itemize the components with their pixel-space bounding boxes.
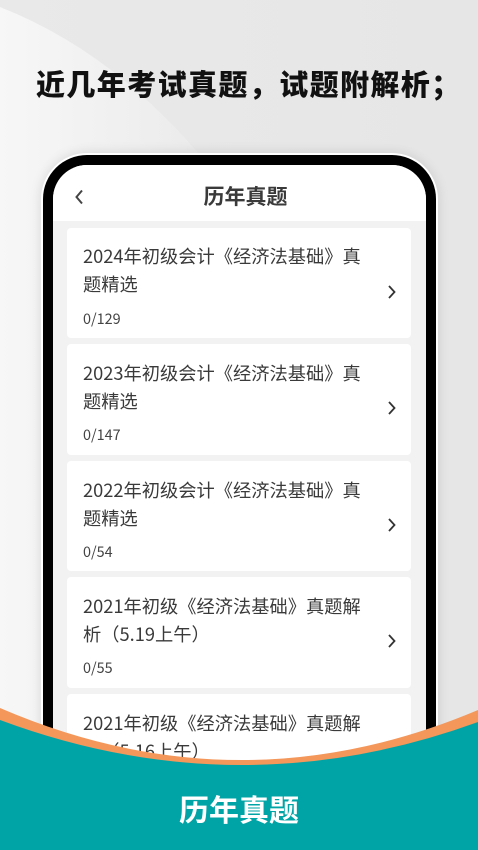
title: 近几年考试真题，试题附解析； <box>36 62 462 104</box>
back arrow <box>75 190 83 204</box>
card 2021 5.16 <box>67 694 411 805</box>
card 2023: 2023年初级会计《经济法基础》真 <box>83 360 361 386</box>
card 2022: 题精选 <box>83 505 138 531</box>
card 2021 5.19: 析（5.19上午） <box>83 621 210 647</box>
orange arc <box>0 708 478 771</box>
card 2022: 0/54 <box>83 541 113 562</box>
card 2021 5.16: 2021年初级《经济法基础》真题解 <box>83 710 361 736</box>
card 2024 <box>67 228 411 338</box>
card 2023: 0/147 <box>83 424 121 445</box>
card 2021 5.19: 0/55 <box>83 657 113 678</box>
teal area <box>0 720 478 850</box>
card 2023: 题精选 <box>83 388 138 414</box>
card 2023 <box>67 344 411 455</box>
card 2021 5.16: 析（5.16上午） <box>83 738 210 764</box>
card 2024: 0/129 <box>83 308 121 329</box>
phone screen <box>53 165 426 795</box>
card 2021 5.19: 2021年初级《经济法基础》真题解 <box>83 593 361 619</box>
card 2022 <box>67 461 411 571</box>
bottom wave banner <box>0 708 478 850</box>
app header <box>53 165 426 221</box>
card 2022: 2022年初级会计《经济法基础》真 <box>83 477 361 503</box>
header title: 历年真题 <box>204 181 288 211</box>
banner label: 历年真题 <box>179 786 299 830</box>
card 2021 5.19 <box>67 577 411 688</box>
phone mockup <box>41 153 438 793</box>
card 2024: 2024年初级会计《经济法基础》真 <box>83 243 361 269</box>
card 2024: 题精选 <box>83 271 138 297</box>
